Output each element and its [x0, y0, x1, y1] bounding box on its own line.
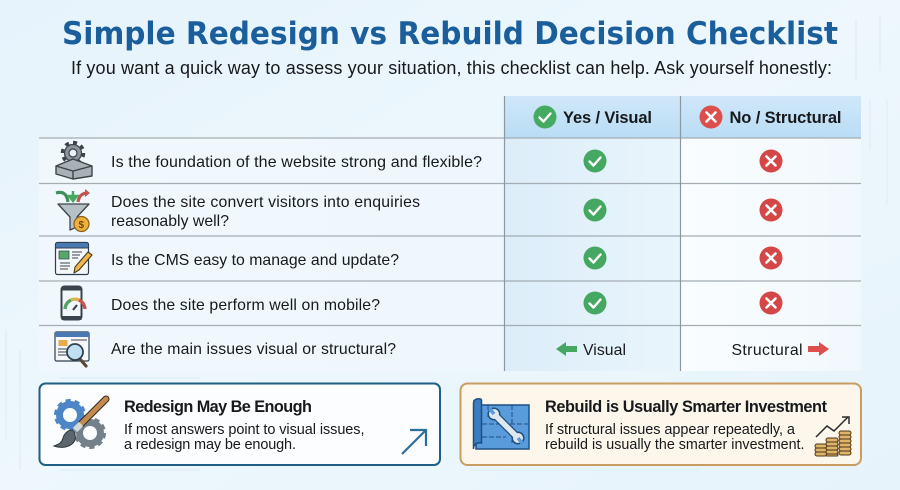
- panel: rebuild is usually smarter investment: If structural issues appear repeatedly, a: [545, 422, 796, 438]
- icon: check: [584, 246, 606, 270]
- column header: yes / visual: Yes / Visual: [563, 109, 652, 127]
- icon: funnel with coin: $: [78, 220, 84, 231]
- panel: redesign may be enough: Redesign May Be Enough: [124, 398, 312, 416]
- row 2: conversion: [56, 189, 782, 232]
- icon: gears and paintbrush: [54, 399, 106, 447]
- row 3: cms: [56, 242, 782, 274]
- panel: rebuild is usually smarter investment: [460, 384, 861, 465]
- icon: blueprint with wrench: [474, 399, 529, 449]
- row 5: visual or structural: Visual: [583, 342, 626, 359]
- row 5: visual or structural: [55, 332, 829, 366]
- icon: window with magnifier: [55, 332, 89, 366]
- panel: redesign may be enough: If most answers point to visual issues,: [124, 422, 364, 438]
- row 2: conversion: Does the site convert visitors into enquiries: [111, 194, 420, 211]
- icon: cross: [760, 198, 782, 222]
- icon: phone with gauge: [62, 286, 85, 320]
- icon: gear on block: [56, 142, 92, 179]
- column header: no / structural: [700, 106, 842, 128]
- icon: check: [584, 292, 606, 314]
- icon: check: [584, 198, 606, 222]
- column header: no / structural: No / Structural: [730, 109, 842, 127]
- column header: yes / visual: [534, 106, 652, 128]
- row 1: foundation: Is the foundation of the website strong and flexible?: [111, 154, 482, 171]
- arrow: right to structural: [808, 342, 829, 356]
- checklist table: [39, 96, 861, 371]
- panel: rebuild is usually smarter investment: rebuild is usually the smarter investment.: [545, 437, 804, 453]
- icon: coins and growth arrow: [815, 417, 851, 456]
- row 5: visual or structural: Are the main issues visual or structural?: [111, 341, 396, 358]
- arrow: left to visual: [556, 342, 577, 356]
- row 3: cms: Is the CMS easy to manage and update?: [111, 252, 399, 269]
- panel: redesign may be enough: [40, 384, 440, 465]
- icon: cross: [760, 150, 782, 172]
- subtitle: If you want a quick way to assess your situation, this checklist can help. Ask yourself honestly:: [71, 58, 832, 78]
- icon: cross: [760, 292, 782, 314]
- panel: rebuild is usually smarter investment: Rebuild is Usually Smarter Investment: [545, 398, 828, 416]
- row 4: mobile: [62, 286, 782, 320]
- row 1: foundation: [56, 142, 782, 179]
- icon: cms window with pencil: [56, 242, 92, 274]
- panel: redesign may be enough: a redesign may be enough.: [124, 437, 296, 453]
- icon: check: [584, 150, 606, 172]
- row 5: visual or structural: Structural: [732, 342, 802, 359]
- icon: cross: [760, 246, 782, 270]
- row 2: conversion: reasonably well?: [111, 213, 229, 230]
- title: Simple Redesign vs Rebuild Decision Checklist: [62, 16, 838, 52]
- icon: funnel with coin: [56, 189, 90, 232]
- icon: diagonal arrow: [402, 430, 426, 454]
- row 4: mobile: Does the site perform well on mobile?: [111, 297, 380, 314]
